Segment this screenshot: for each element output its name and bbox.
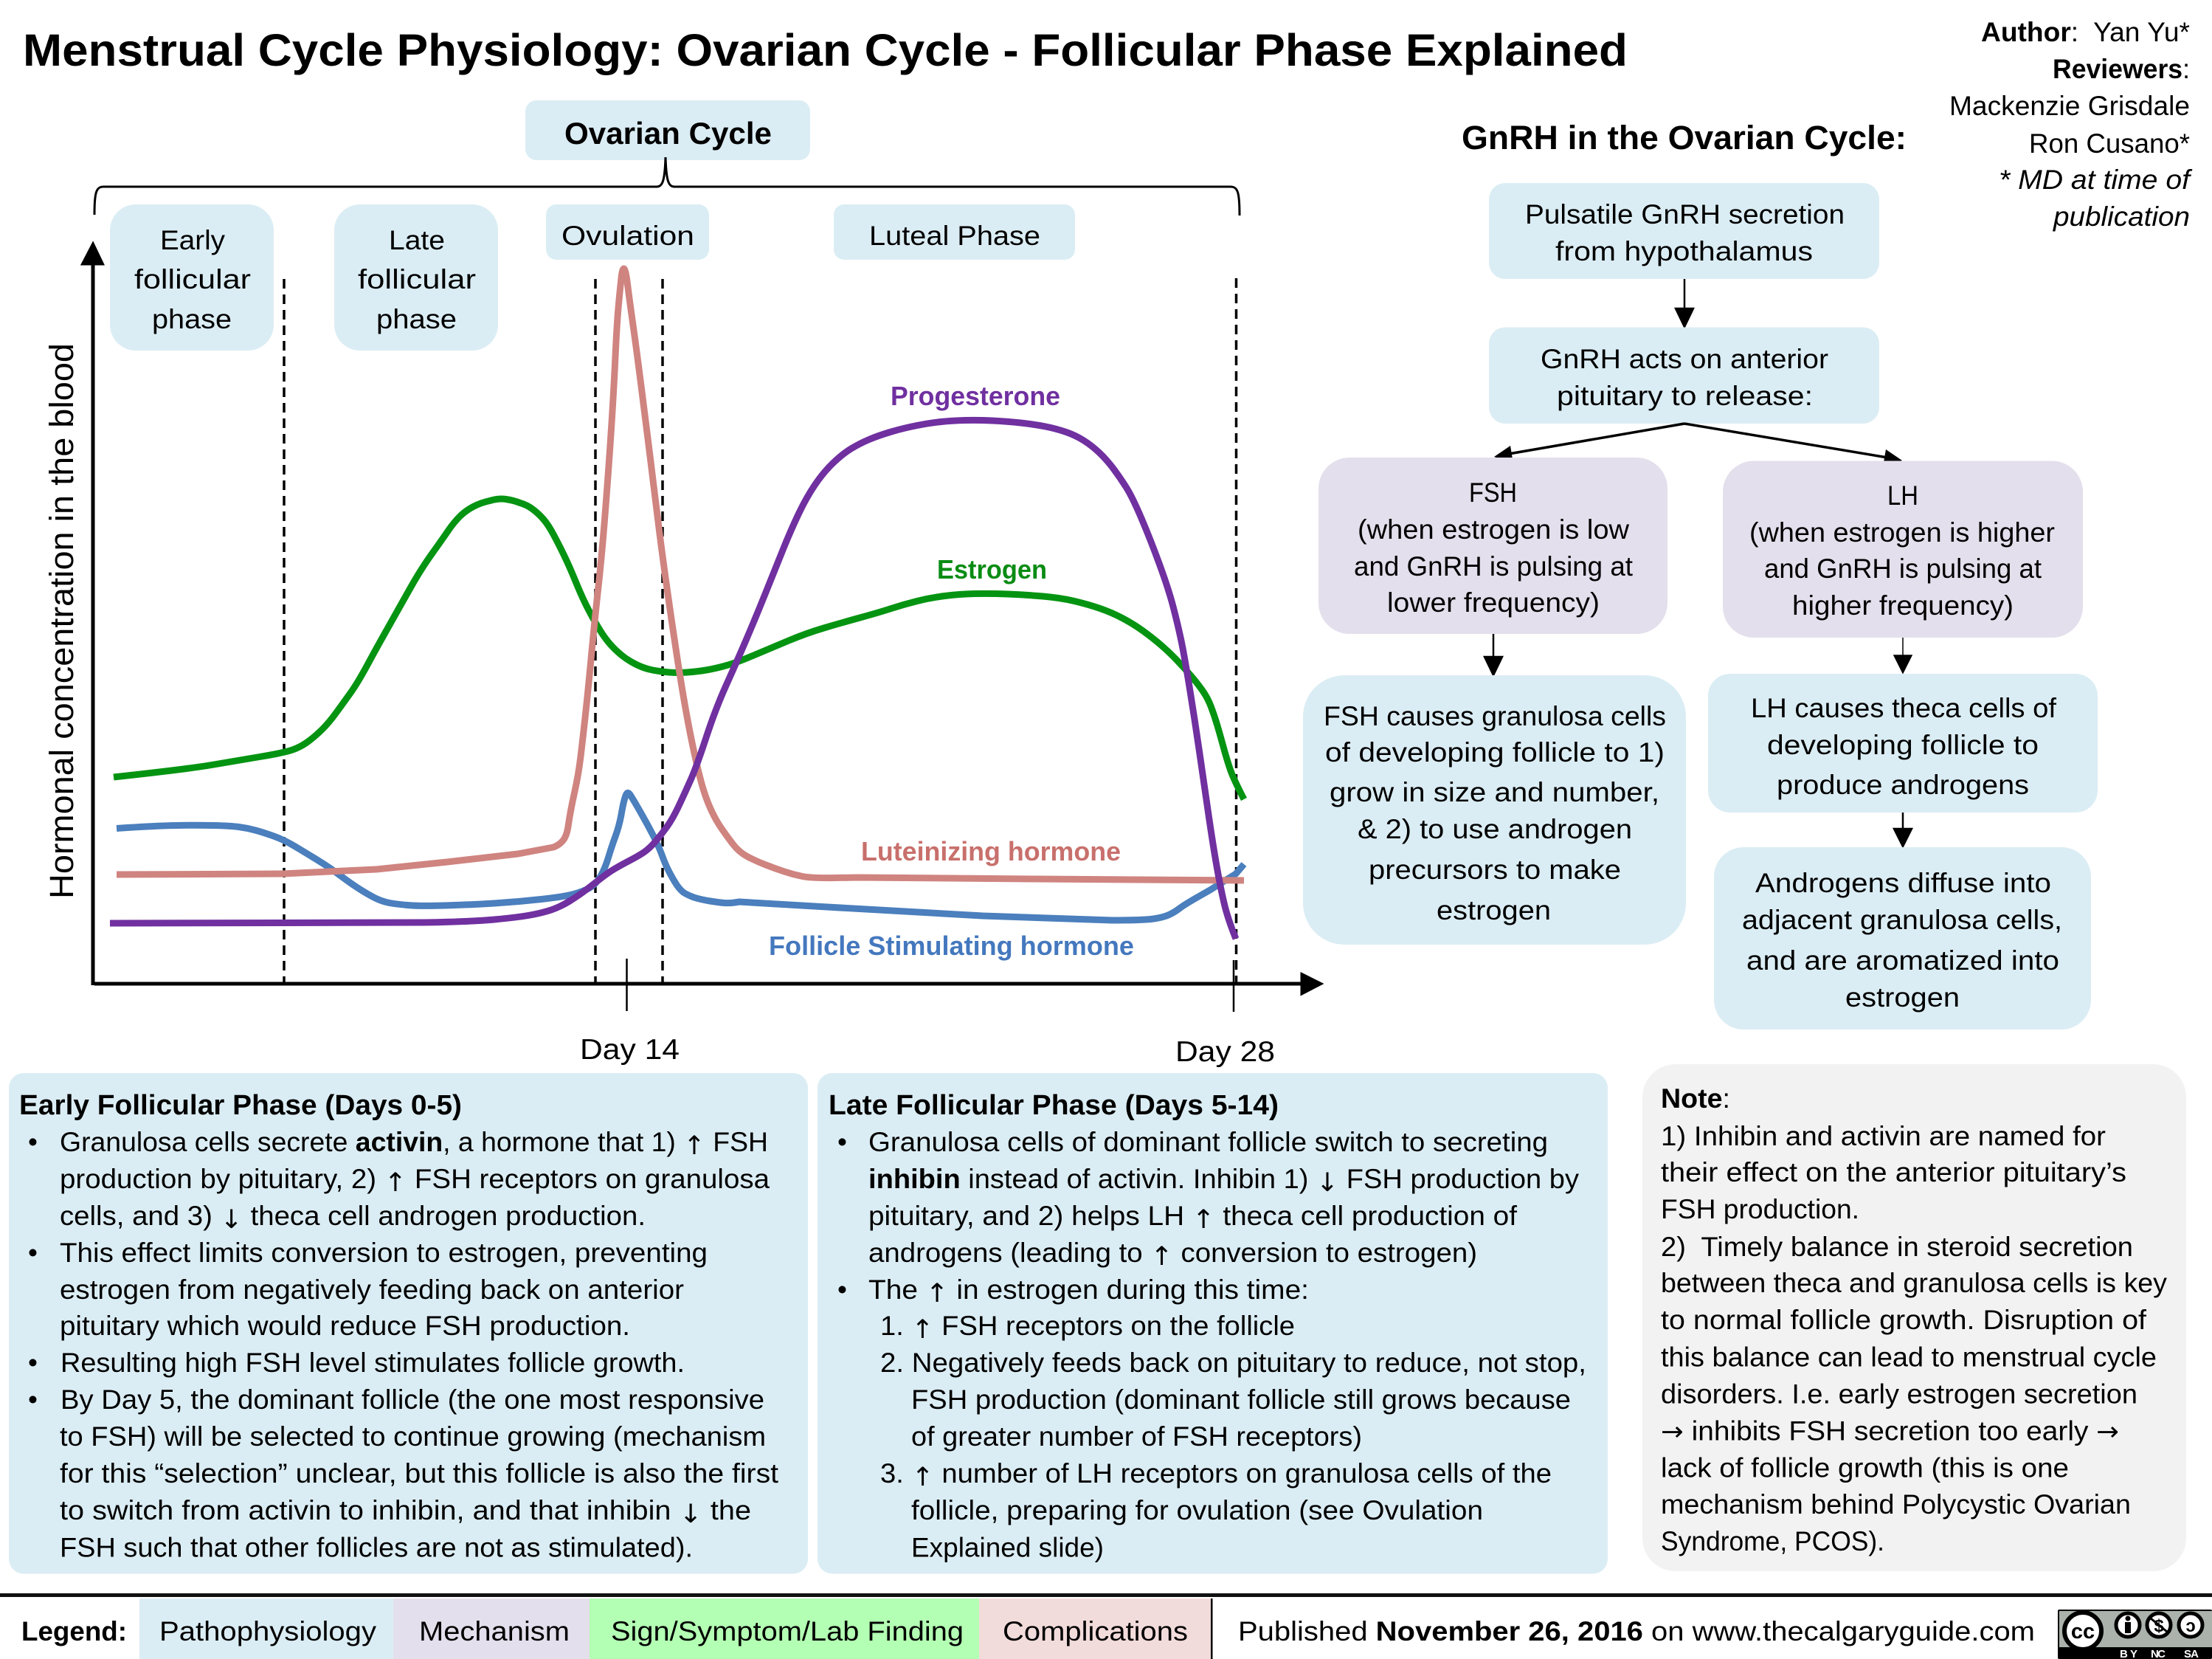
panel: early follicular phase: ↑ bbox=[384, 1168, 407, 1198]
panel: note bbox=[1642, 1064, 2186, 1571]
phase label: late follicular: follicular bbox=[358, 264, 476, 294]
panel: early follicular phase: theca cell androgen production. bbox=[243, 1201, 646, 1231]
footer rule bbox=[0, 1593, 2212, 1597]
flow box: anterior pituitary: pituitary to release: bbox=[1557, 381, 1813, 411]
phase label: luteal bbox=[834, 204, 1075, 260]
flow box: LH effect on theca cells bbox=[1708, 674, 2098, 813]
flow box: FSH: FSH bbox=[1469, 477, 1517, 508]
arrow: LH down bbox=[1894, 638, 1912, 673]
panel: late follicular phase: Late Follicular Phase (Days 5-14) bbox=[829, 1090, 1279, 1121]
panel: early follicular phase: to switch from activin to inhibin, and that inhibin bbox=[60, 1495, 630, 1525]
panel: late follicular phase: 2. Negatively feeds back on pituitary to reduce, not stop, bbox=[880, 1348, 1586, 1378]
flow box: FSH effect on granulosa cells: & 2) to use androgen bbox=[1358, 814, 1632, 844]
panel: note: disorders. I.e. early estrogen secretion bbox=[1661, 1379, 2137, 1410]
panel: early follicular phase: • bbox=[28, 1384, 38, 1415]
panel: early follicular phase: ↓ bbox=[221, 1205, 243, 1235]
panel: early follicular phase: for this “selection” unclear, but this follicle is also the first bbox=[60, 1458, 779, 1489]
flow box: LH effect on theca cells: LH causes theca cells of bbox=[1751, 693, 2057, 723]
flow box: LH: (when estrogen is higher bbox=[1749, 517, 2055, 548]
phase label: late follicular bbox=[334, 204, 498, 351]
panel: late follicular phase: of greater number of FSH receptors) bbox=[911, 1421, 1362, 1452]
flow box: androgens diffuse: and are aromatized into bbox=[1746, 945, 2059, 976]
heading: Ovarian Cycle: Ovarian Cycle bbox=[564, 116, 772, 151]
y axis label: Hormonal concentration in the blood bbox=[43, 343, 80, 899]
icon: creative commons badge bbox=[2058, 1610, 2212, 1659]
panel: late follicular phase: The bbox=[868, 1275, 916, 1305]
panel: early follicular phase: production by pituitary, 2) bbox=[60, 1164, 364, 1194]
author credits: Ron Cusano* bbox=[2029, 128, 2190, 159]
panel: early follicular phase: FSH receptors on granulosa bbox=[407, 1164, 770, 1194]
panel: early follicular phase: FSH bbox=[705, 1127, 768, 1157]
panel: early follicular phase: By Day 5, the dominant follicle (the one most responsive bbox=[61, 1384, 764, 1415]
panel: late follicular phase: Explained slide) bbox=[911, 1532, 1104, 1563]
label: day 28: Day 28 bbox=[1175, 1036, 1275, 1068]
panel: early follicular phase bbox=[9, 1073, 808, 1573]
heading: GnRH in the ovarian cycle: GnRH in the Ovarian Cycle: bbox=[1462, 119, 1907, 156]
flow box: FSH effect on granulosa cells: of developing follicle to 1) bbox=[1325, 737, 1665, 768]
panel: early follicular phase: estrogen from negatively feeding back on anterior bbox=[60, 1275, 684, 1305]
flow box: androgens diffuse: adjacent granulosa cells, bbox=[1742, 905, 2062, 935]
flow box: LH: higher frequency) bbox=[1792, 590, 2014, 621]
panel: early follicular phase: Granulosa cells secrete activin, a hormone that 1) bbox=[60, 1127, 674, 1157]
panel: note: 2) Timely balance in steroid secretion bbox=[1661, 1232, 2133, 1262]
panel: note: FSH production. bbox=[1661, 1194, 1859, 1224]
panel: note: this balance can lead to menstrual cycle bbox=[1661, 1342, 2157, 1373]
flow box: LH: LH bbox=[1887, 480, 1918, 511]
flow box: FSH: and GnRH is pulsing at bbox=[1354, 551, 1634, 582]
panel: late follicular phase bbox=[818, 1073, 1608, 1573]
flow box: pulsatile GnRH bbox=[1489, 183, 1879, 279]
panel: note: to normal follicle growth. Disruption of bbox=[1661, 1305, 2147, 1335]
author credits: Mackenzie Grisdale bbox=[1949, 91, 2190, 121]
flow box: LH bbox=[1723, 461, 2083, 638]
panel: note: Syndrome, PCOS). bbox=[1661, 1526, 1884, 1556]
chart: hormone curves bbox=[83, 245, 1320, 1012]
label: day 14: Day 14 bbox=[580, 1034, 680, 1066]
publication line: Published November 26, 2016 on www.thecalgaryguide.com bbox=[1238, 1616, 2035, 1646]
author credits: publication bbox=[2053, 201, 2190, 232]
curve: estrogen bbox=[114, 499, 1244, 799]
title: Menstrual Cycle Physiology: Ovarian Cycle - Follicular Phase Explained bbox=[23, 25, 1628, 75]
panel: note: lack of follicle growth (this is one bbox=[1661, 1452, 2069, 1483]
panel: early follicular phase: Resulting high FSH level stimulates follicle growth. bbox=[61, 1348, 685, 1378]
panel: late follicular phase: inhibin instead of activin. Inhibin 1) bbox=[868, 1164, 1299, 1194]
flow box: LH effect on theca cells: developing follicle to bbox=[1767, 730, 2039, 760]
panel: late follicular phase: conversion to estrogen) bbox=[1173, 1238, 1477, 1268]
curve: follicle stimulating hormone bbox=[117, 793, 1244, 920]
panel: early follicular phase: ↑ bbox=[683, 1131, 705, 1161]
panel: late follicular phase: ↑ bbox=[1150, 1242, 1173, 1272]
label: estrogen: Estrogen bbox=[937, 554, 1047, 584]
panel: late follicular phase: follicle, preparing for ovulation (see Ovulation bbox=[911, 1495, 1483, 1525]
panel: early follicular phase: to FSH) will be selected to continue growing (mechanism bbox=[60, 1421, 766, 1452]
label: luteinizing hormone: Luteinizing hormone bbox=[861, 836, 1121, 866]
phase label: luteal: Luteal Phase bbox=[869, 221, 1040, 251]
author credits: Author: Yan Yu* bbox=[1981, 17, 2190, 47]
arrow: FSH down bbox=[1485, 634, 1502, 675]
author credits: Reviewers: bbox=[2053, 54, 2190, 84]
phase label: early follicular bbox=[110, 204, 274, 351]
legend: Mechanism bbox=[419, 1616, 570, 1646]
curve: progesterone bbox=[110, 420, 1236, 939]
flow box: pulsatile GnRH: from hypothalamus bbox=[1555, 236, 1813, 266]
y axis arrow bbox=[83, 245, 102, 985]
panel: late follicular phase: androgens (leading to bbox=[868, 1238, 1133, 1268]
panel: note: mechanism behind Polycystic Ovarian bbox=[1661, 1489, 2131, 1520]
panel: early follicular phase: Early Follicular Phase (Days 0-5) bbox=[19, 1090, 462, 1121]
legend bbox=[21, 1598, 1213, 1659]
phase label: early follicular: phase bbox=[152, 304, 232, 334]
panel: early follicular phase: cells, and 3) bbox=[60, 1201, 207, 1231]
arrow: GnRH to pituitary bbox=[1676, 279, 1693, 327]
panel: late follicular phase: 1. bbox=[880, 1311, 903, 1341]
panel: late follicular phase: • bbox=[837, 1127, 847, 1157]
panel: note: between theca and granulosa cells is key bbox=[1661, 1268, 2168, 1298]
x axis arrow bbox=[94, 975, 1320, 993]
flow box: FSH: (when estrogen is low bbox=[1358, 514, 1629, 545]
panel: late follicular phase: • bbox=[837, 1275, 847, 1305]
panel: late follicular phase: ↑ bbox=[1192, 1205, 1215, 1235]
flow box: androgens diffuse: Androgens diffuse into bbox=[1755, 868, 2051, 898]
flow box: androgens diffuse: estrogen bbox=[1845, 982, 1960, 1013]
panel: late follicular phase: 3. bbox=[880, 1458, 903, 1489]
panel: early follicular phase: the bbox=[702, 1495, 751, 1525]
icon: creative commons badge: ↄ bbox=[2185, 1616, 2196, 1636]
panel: early follicular phase: • bbox=[28, 1238, 38, 1268]
panel: note: 1) Inhibin and activin are named for bbox=[1661, 1121, 2106, 1151]
curve: luteinizing hormone bbox=[117, 269, 1244, 880]
flow box: FSH effect on granulosa cells: precursors to make bbox=[1369, 855, 1621, 885]
arrows: pituitary to FSH and LH bbox=[1494, 424, 1902, 466]
panel: early follicular phase: This effect limits conversion to estrogen, preventing bbox=[60, 1238, 708, 1268]
phase label: early follicular: follicular bbox=[134, 264, 251, 294]
phase label: late follicular: Late bbox=[389, 225, 445, 255]
brace spanning the cycle bbox=[94, 157, 1240, 215]
panel: late follicular phase: FSH receptors on the follicle bbox=[934, 1311, 1295, 1341]
panel: early follicular phase: pituitary which would reduce FSH production. bbox=[60, 1311, 630, 1341]
panel: late follicular phase: theca cell production of bbox=[1215, 1201, 1518, 1231]
phase label: ovulation bbox=[546, 204, 709, 260]
icon: creative commons badge: cc bbox=[2071, 1620, 2095, 1644]
panel: late follicular phase: ↓ bbox=[1316, 1168, 1338, 1198]
flow box: LH: and GnRH is pulsing at bbox=[1764, 553, 2042, 584]
phase label: ovulation: Ovulation bbox=[561, 221, 694, 251]
flow box: FSH effect on granulosa cells bbox=[1303, 675, 1686, 945]
flow box: anterior pituitary: GnRH acts on anterior bbox=[1541, 344, 1828, 374]
flow box: FSH effect on granulosa cells: grow in size and number, bbox=[1330, 777, 1659, 807]
flow box: anterior pituitary bbox=[1489, 328, 1879, 424]
panel: late follicular phase: pituitary, and 2) helps LH bbox=[868, 1201, 1170, 1231]
flow box: FSH effect on granulosa cells: estrogen bbox=[1437, 895, 1551, 925]
panel: late follicular phase: ↑ bbox=[926, 1279, 949, 1308]
flow box: LH effect on theca cells: produce androgens bbox=[1777, 770, 2029, 800]
flow box: pulsatile GnRH: Pulsatile GnRH secretion bbox=[1525, 199, 1845, 230]
legend: Legend: bbox=[21, 1616, 127, 1646]
flow box: FSH bbox=[1318, 458, 1667, 634]
panel: late follicular phase: FSH production (dominant follicle still grows because bbox=[911, 1384, 1571, 1415]
panel: late follicular phase: FSH production by bbox=[1338, 1164, 1579, 1194]
flow box: androgens diffuse bbox=[1714, 847, 2091, 1029]
panel: late follicular phase: ↑ bbox=[911, 1315, 934, 1345]
phase label: early follicular: Early bbox=[160, 225, 226, 255]
panel: note: → inhibits FSH secretion too early → bbox=[1661, 1415, 2119, 1446]
panel: late follicular phase: number of LH receptors on granulosa cells of the bbox=[934, 1458, 1552, 1489]
author credits: * MD at time of bbox=[1999, 165, 2193, 195]
icon: creative commons badge: $ bbox=[2154, 1616, 2164, 1636]
phase label: late follicular: phase bbox=[376, 304, 457, 334]
panel: late follicular phase: in estrogen during this time: bbox=[949, 1275, 1309, 1305]
label: progesterone: Progesterone bbox=[891, 381, 1060, 411]
panel: note: their effect on the anterior pituitary’s bbox=[1661, 1157, 2126, 1187]
legend: Sign/Symptom/Lab Finding bbox=[611, 1616, 964, 1646]
panel: early follicular phase: FSH such that other follicles are not as stimulated). bbox=[60, 1532, 693, 1563]
panel: early follicular phase: • bbox=[28, 1348, 38, 1378]
panel: late follicular phase: Granulosa cells of dominant follicle switch to secreting bbox=[868, 1127, 1548, 1157]
panel: note: Note: bbox=[1661, 1083, 1730, 1114]
panel: early follicular phase: • bbox=[28, 1127, 38, 1157]
label: follicle stimulating hormone: Follicle Stimulating hormone bbox=[769, 931, 1134, 961]
panel: late follicular phase: ↑ bbox=[912, 1463, 934, 1492]
flow box: FSH: lower frequency) bbox=[1387, 587, 1600, 618]
heading: Ovarian Cycle bbox=[525, 100, 810, 160]
legend: Pathophysiology bbox=[159, 1616, 377, 1646]
panel: early follicular phase: ↓ bbox=[679, 1500, 702, 1529]
arrow: theca to androgens bbox=[1894, 813, 1912, 846]
flow box: FSH effect on granulosa cells: FSH causes granulosa cells bbox=[1324, 701, 1666, 731]
author credits bbox=[1949, 17, 2193, 232]
legend: Complications bbox=[1003, 1616, 1188, 1646]
